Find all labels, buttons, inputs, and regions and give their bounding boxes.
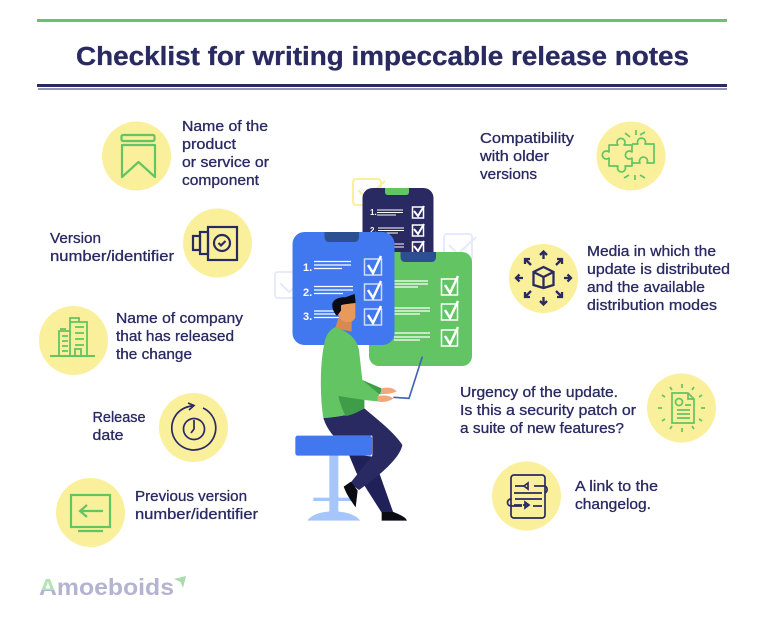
item: previous version [56, 478, 258, 547]
icon: changelog document [508, 475, 547, 518]
text: changelog link [575, 479, 658, 513]
text: release date: date [92, 428, 124, 444]
face [338, 303, 355, 322]
text: compatibility: Compatibility [480, 131, 575, 147]
title: Checklist for writing impeccable release notes [76, 43, 689, 71]
text: name of the product: component [182, 173, 259, 189]
back leg [348, 453, 393, 513]
front leg [323, 408, 402, 490]
sweater [321, 327, 379, 418]
person on stool [295, 294, 422, 521]
text: company name [116, 311, 244, 363]
text: changelog link: changelog. [575, 497, 651, 513]
item: name of the product [102, 119, 269, 190]
text: name of the product: product [182, 137, 236, 153]
text: name of the product [182, 119, 269, 189]
text: release date [92, 410, 146, 444]
neck [335, 317, 352, 332]
text: urgency: a suite of new features? [460, 421, 624, 437]
item: changelog link [492, 462, 658, 530]
item: company name [39, 306, 244, 375]
icon: bookmark [122, 135, 155, 177]
icon: version boxes [193, 227, 237, 260]
clipboard: blue [292, 232, 394, 345]
text: previous version: Previous version [135, 489, 247, 505]
icon: clock with arrow [172, 403, 216, 450]
text: compatibility: versions [480, 167, 537, 183]
item: release date [92, 393, 228, 462]
text: previous version [135, 489, 258, 523]
text: distribution media: and the available [587, 280, 705, 296]
text: version number [50, 231, 174, 265]
item: distribution media [509, 244, 730, 314]
clipboard: navy: 1. [370, 208, 377, 217]
text: company name: that has released [116, 329, 234, 345]
text: name of the product: Name of the [182, 119, 268, 135]
text: compatibility [479, 131, 575, 183]
text: urgency [460, 385, 636, 437]
text: urgency: Is this a security patch or [460, 403, 636, 419]
clipboard: blue: 2. [303, 287, 312, 299]
item: compatibility [479, 122, 666, 190]
text: name of the product: or service or [182, 155, 269, 171]
clipboard: blue: 3. [303, 311, 312, 323]
text: company name: Name of company [116, 311, 244, 327]
far arm [362, 380, 382, 395]
clipboard: blue: 1. [303, 262, 312, 274]
text: version number: number/identifier [50, 249, 174, 265]
icon: glowing document [658, 384, 705, 432]
text: distribution media [587, 244, 730, 314]
text: version number: Version [50, 231, 101, 247]
clipboard: navy [362, 188, 434, 268]
text: changelog link: A link to the [575, 479, 658, 495]
stool base [329, 453, 338, 513]
clipboard: navy: 2. [370, 226, 377, 235]
text: compatibility: with older [479, 149, 549, 165]
laptop [393, 357, 422, 398]
clipboard: green [369, 252, 472, 366]
hands [381, 388, 397, 394]
text: urgency: Urgency of the update. [460, 385, 618, 401]
icon: box with arrows [516, 252, 571, 304]
text: company name: the change [116, 347, 192, 363]
text: previous version: number/identifier [135, 507, 258, 523]
icon: office buildings [50, 318, 95, 356]
item: version number [50, 208, 252, 278]
illustration: clipboards and person [275, 179, 476, 521]
logo: Amoeboids: Amoeboids [39, 574, 174, 600]
item: urgency [460, 374, 716, 442]
ghost checkboxes [275, 179, 476, 298]
icon: monitor with back arrow [71, 495, 110, 531]
seat [295, 436, 372, 456]
text: distribution media: distribution modes [587, 298, 717, 314]
icon: puzzle pieces [602, 130, 654, 180]
text: distribution media: update is distributed [587, 262, 730, 278]
text: release date: Release [92, 410, 146, 426]
text: distribution media: Media in which the [587, 244, 716, 260]
hair [332, 294, 356, 316]
